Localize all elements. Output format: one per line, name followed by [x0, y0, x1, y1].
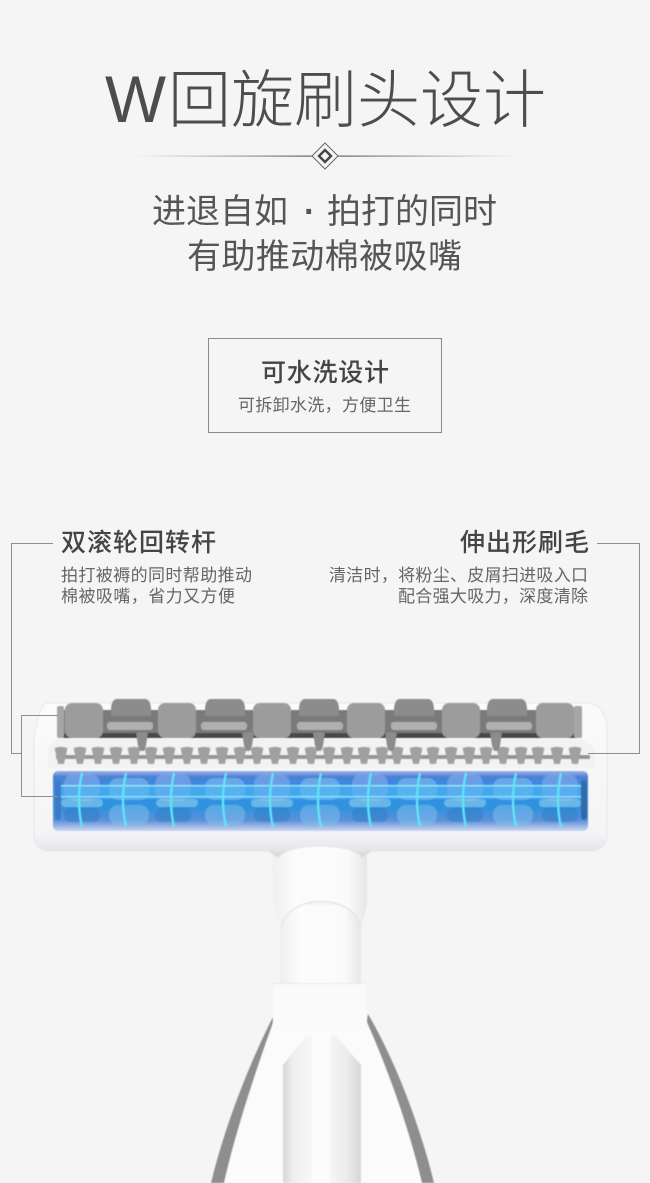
subtitle: ·	[304, 193, 315, 231]
right feature text: 清洁时，将粉尘、皮屑扫进吸入口	[329, 566, 588, 585]
text: washable description: 可拆卸水洗，方便卫生	[238, 396, 411, 415]
right feature text	[329, 529, 589, 606]
bristle strip	[48, 732, 595, 768]
left feature text	[61, 529, 252, 606]
vacuum stand fins	[211, 1014, 434, 1183]
left feature text: 棉被吸嘴，省力又方便	[61, 587, 235, 606]
vacuum neck	[272, 843, 367, 1028]
divider with diamond ornament	[133, 143, 517, 169]
leader lines	[12, 544, 640, 796]
roller lobes	[56, 773, 586, 825]
glowing blue roller window	[53, 771, 588, 831]
subtitle: 有助推动棉被吸嘴	[187, 238, 462, 276]
panel: washable design	[208, 338, 442, 432]
glowing arcs	[79, 773, 561, 827]
subtitle: 拍打的同时	[327, 193, 497, 231]
brush head body	[34, 703, 607, 858]
heading: washable: 可水洗设计	[261, 359, 389, 387]
right feature text: 伸出形刷毛	[460, 529, 589, 557]
title: W	[105, 62, 167, 136]
left feature text: 双滚轮回转杆	[61, 529, 216, 557]
subtitle	[152, 193, 497, 276]
left feature text: 拍打被褥的同时帮助推动	[61, 566, 252, 585]
title: 回旋刷头设计	[168, 66, 546, 136]
subtitle: 进退自如	[152, 193, 288, 231]
right feature text: 配合强大吸力，深度清除	[398, 587, 588, 606]
rotating roller	[57, 699, 582, 738]
